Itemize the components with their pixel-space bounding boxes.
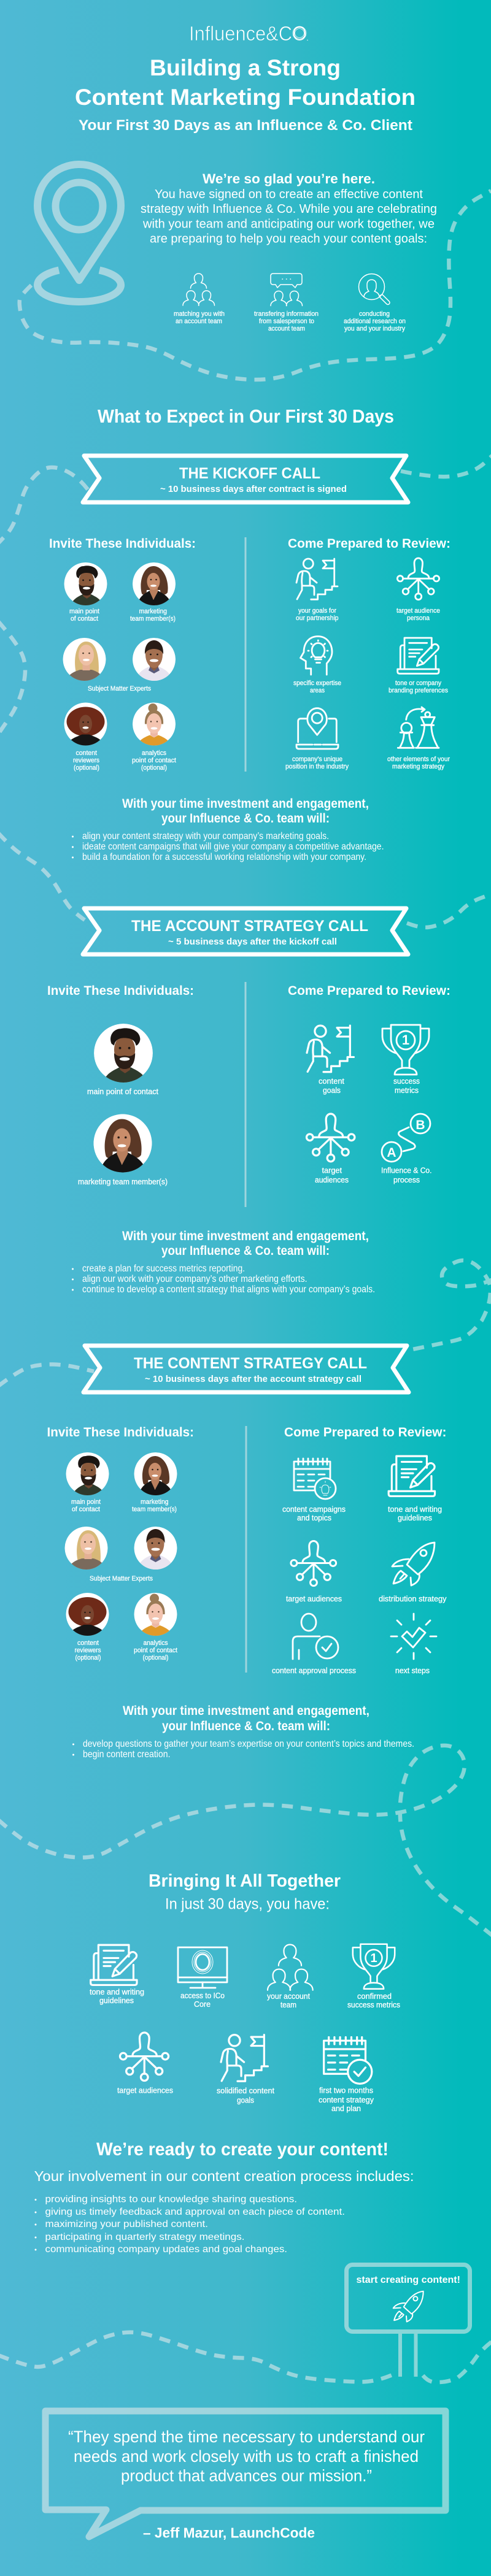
goal: conducting research: conducting [359,310,390,318]
panel: content review: content campaigns [282,1505,346,1514]
panel: content review: tone and writing [388,1505,442,1514]
testimonial quote bubble [45,2411,446,2537]
achievements row one: guidelines [99,1996,134,2005]
panel: kickoff invite: main point [69,608,99,615]
team commitments: account: your Influence & Co. team will: [161,1243,330,1258]
panel: kickoff review: branding preferences [389,687,448,694]
heading: bringing it all together: In just 30 days, you have: [165,1895,330,1912]
goal: transferring information: transfering information [254,310,319,318]
panel: content invite: Invite These Individuals: [47,1425,194,1439]
panel: content review: next steps [395,1666,430,1675]
panel: account review: metrics [395,1086,419,1095]
subtitle: Your First 30 Days as an Influence & Co. Client [79,117,412,134]
team commitments: account: align our work with your company’s other marketing efforts. [82,1274,307,1284]
intro text: strategy with Influence & Co. While you are celebrating [141,202,437,216]
panel: kickoff invite: content [76,749,97,757]
panel: kickoff invite: of contact [71,615,98,623]
panel: content invite: content [77,1639,99,1647]
achievements row two: goals [237,2095,254,2105]
divider: content [246,1426,247,1673]
panel: kickoff invite: (optional) [141,764,167,772]
quote attribution: – Jeff Mazur, LaunchCode [143,2524,315,2540]
team commitments: kickoff: With your time investment and engagement, [122,796,369,811]
panel: content review: content approval process [272,1666,356,1675]
involvement list [34,2168,414,2255]
divider: account [244,982,247,1207]
achievements row one: team [280,2000,296,2009]
panel: kickoff invite: analytics [142,749,166,757]
panel: kickoff invite: (optional) [74,764,99,772]
panel: content review: and topics [297,1513,331,1522]
team commitments: kickoff [72,796,384,862]
panel: kickoff invite: Subject Matter Experts [88,685,151,692]
banner: kickoff call: THE KICKOFF CALL [179,465,320,482]
team commitments: account: create a plan for success metrics reporting. [82,1263,245,1274]
team commitments: content: begin content creation. [83,1749,171,1760]
panel: content invite: (optional) [75,1654,101,1662]
title [75,55,416,110]
panel: content invite: Subject Matter Experts [90,1575,153,1582]
panel: account review: 1 [402,1032,409,1048]
heading: ready to create: We’re ready to create your content! [96,2139,389,2160]
heading: bringing it all together [149,1871,341,1912]
signpost: start creating content! [356,2275,460,2285]
panel: account review: goals [323,1086,341,1095]
title: Building a Strong [150,55,341,80]
panel: kickoff review: our partnership [296,615,339,622]
achievements row one: success metrics [347,2000,400,2009]
achievements row one: your account [267,1991,310,2001]
title: Content Marketing Foundation [75,85,416,110]
goal: matching with account team: an account team [176,318,222,325]
team commitments: content: With your time investment and engagement, [123,1703,369,1718]
involvement list: participating in quarterly strategy meetings. [45,2232,244,2242]
panel: account review: B [416,1118,425,1132]
panel: kickoff invite: marketing [139,608,167,615]
panel: kickoff review: company’s unique [292,756,342,763]
icon: map pin [37,164,121,302]
achievements row two: target audiences [117,2085,173,2095]
achievements row one [90,1944,400,2009]
panel: content review: distribution strategy [379,1594,447,1603]
banner: content strategy call: ~ 10 business days after the account strategy call [145,1374,361,1384]
section heading: What to Expect in Our First 30 Days [98,405,394,427]
banner: content strategy call: THE CONTENT STRATEGY CALL [134,1355,367,1372]
testimonial quote bubble: “They spend the time necessary to understand our [68,2428,425,2446]
banner: account strategy call [83,908,408,954]
panel: content review [272,1425,447,1675]
team commitments: account [72,1229,375,1295]
panel: content review: target audiences [286,1594,342,1603]
team commitments: kickoff: your Influence & Co. team will: [161,811,330,826]
achievements row one: access to ICo [180,1991,225,2000]
banner: kickoff call [83,456,408,502]
goal: matching with account team: matching you with [174,310,225,318]
achievements row two: first two months [319,2085,373,2095]
intro text: We’re so glad you’re here. [203,171,375,186]
panel: kickoff invite [49,536,196,772]
panel: account review: A [387,1146,396,1160]
panel: content invite: of contact [72,1506,100,1513]
banner: content strategy call [83,1346,409,1392]
team commitments: content [72,1703,414,1760]
achievements row one: tone and writing [90,1987,144,1996]
intro text: with your team and anticipating our work together, we [142,217,435,231]
goal: conducting research: you and your industry [344,325,405,332]
intro text: You have signed on to create an effective content [155,188,423,201]
panel: kickoff review: areas [310,687,325,694]
panel: kickoff invite: point of contact [132,757,176,764]
panel: kickoff review: tone or company [395,680,441,687]
divider: kickoff [244,537,247,772]
panel: content review: guidelines [398,1513,432,1522]
team commitments: content: your Influence & Co. team will: [162,1719,330,1733]
achievements row two: content strategy [319,2095,374,2104]
banner: kickoff call: ~ 10 business days after contract is signed [160,484,347,494]
panel: account review: audiences [315,1175,349,1184]
panel: content invite: team member(s) [132,1506,177,1513]
panel: kickoff review: specific expertise [293,680,341,687]
panel: kickoff review: other elements of your [387,756,450,763]
panel: content invite: marketing [141,1498,168,1506]
achievements row two [117,2033,374,2113]
panel: content invite: main point [71,1498,101,1506]
involvement list: Your involvement in our content creation process includes: [34,2168,414,2184]
panel: content review: Come Prepared to Review: [284,1425,447,1439]
panel: content invite: reviewers [75,1647,101,1654]
team commitments: account: With your time investment and engagement, [122,1229,369,1243]
banner: account strategy call: THE ACCOUNT STRATEGY CALL [131,918,368,935]
panel: kickoff invite: team member(s) [130,615,176,623]
panel: account invite: marketing team member(s) [78,1177,168,1186]
team commitments: content: develop questions to gather your team’s expertise on your content’s topics and themes. [83,1739,414,1749]
intro text [141,171,437,245]
achievements row one: 1 [370,1952,377,1965]
involvement list: providing insights to our knowledge sharing questions. [45,2195,297,2204]
achievements row two: solidified content [217,2086,274,2095]
intro text: are preparing to help you reach your content goals: [150,232,427,245]
panel: account invite [47,983,194,1186]
team commitments: kickoff: ideate content campaigns that will give your company a competitive advantage. [82,841,384,852]
achievements row one: confirmed [357,1991,392,2001]
panel: content invite [47,1425,194,1662]
panel: kickoff review: persona [407,615,430,622]
achievements row one: Core [194,1999,211,2009]
goal: conducting research: additional research on [344,318,406,325]
testimonial quote bubble: needs and work closely with us to craft a finished [74,2447,419,2466]
panel: account review: Influence & Co. [381,1165,432,1175]
panel: account review: process [393,1175,420,1184]
involvement list: giving us timely feedback and approval on each piece of content. [45,2207,345,2217]
banner: account strategy call: ~ 5 business days after the kickoff call [168,937,337,947]
panel: account review: content [319,1076,344,1086]
achievements row two: and plan [331,2104,361,2113]
logo: Influence&CO [189,22,307,45]
panel: account review: target [322,1165,342,1175]
panel: account invite: main point of contact [87,1087,158,1096]
panel: content invite: (optional) [142,1654,168,1662]
panel: kickoff review: marketing strategy [392,763,444,770]
involvement list: maximizing your published content. [45,2219,208,2229]
goal: matching with account team [174,274,225,325]
team commitments: kickoff: build a foundation for a successful working relationship with your company. [82,852,366,862]
panel: content invite: analytics [144,1639,168,1647]
panel: kickoff invite: reviewers [73,757,99,764]
panel: kickoff review: target audience [396,607,440,615]
testimonial quote bubble: product that advances our mission.” [121,2467,372,2485]
goal: transferring information: account team [268,325,305,332]
panel: kickoff review: position in the industry [285,763,349,770]
goal: conducting research [344,274,406,332]
panel: kickoff review [285,536,450,770]
goal: transferring information: from salesperson to [259,318,314,325]
panel: account invite: Invite These Individuals: [47,983,194,998]
panel: kickoff review: Come Prepared to Review: [288,536,450,551]
panel: content invite: point of contact [134,1647,177,1654]
goal: transferring information [254,274,319,332]
panel: account review: success [393,1076,420,1086]
panel: account review: Come Prepared to Review: [288,983,450,998]
panel: account review [288,983,450,1184]
panel: kickoff review: your goals for [298,607,336,615]
panel: kickoff invite: Invite These Individuals: [49,536,196,551]
team commitments: account: continue to develop a content strategy that aligns with your company’s goals. [82,1284,375,1295]
team commitments: kickoff: align your content strategy with your company’s marketing goals. [82,831,329,841]
signpost [346,2264,470,2377]
heading: bringing it all together: Bringing It All Together [149,1871,341,1891]
involvement list: communicating company updates and goal changes. [45,2244,287,2255]
